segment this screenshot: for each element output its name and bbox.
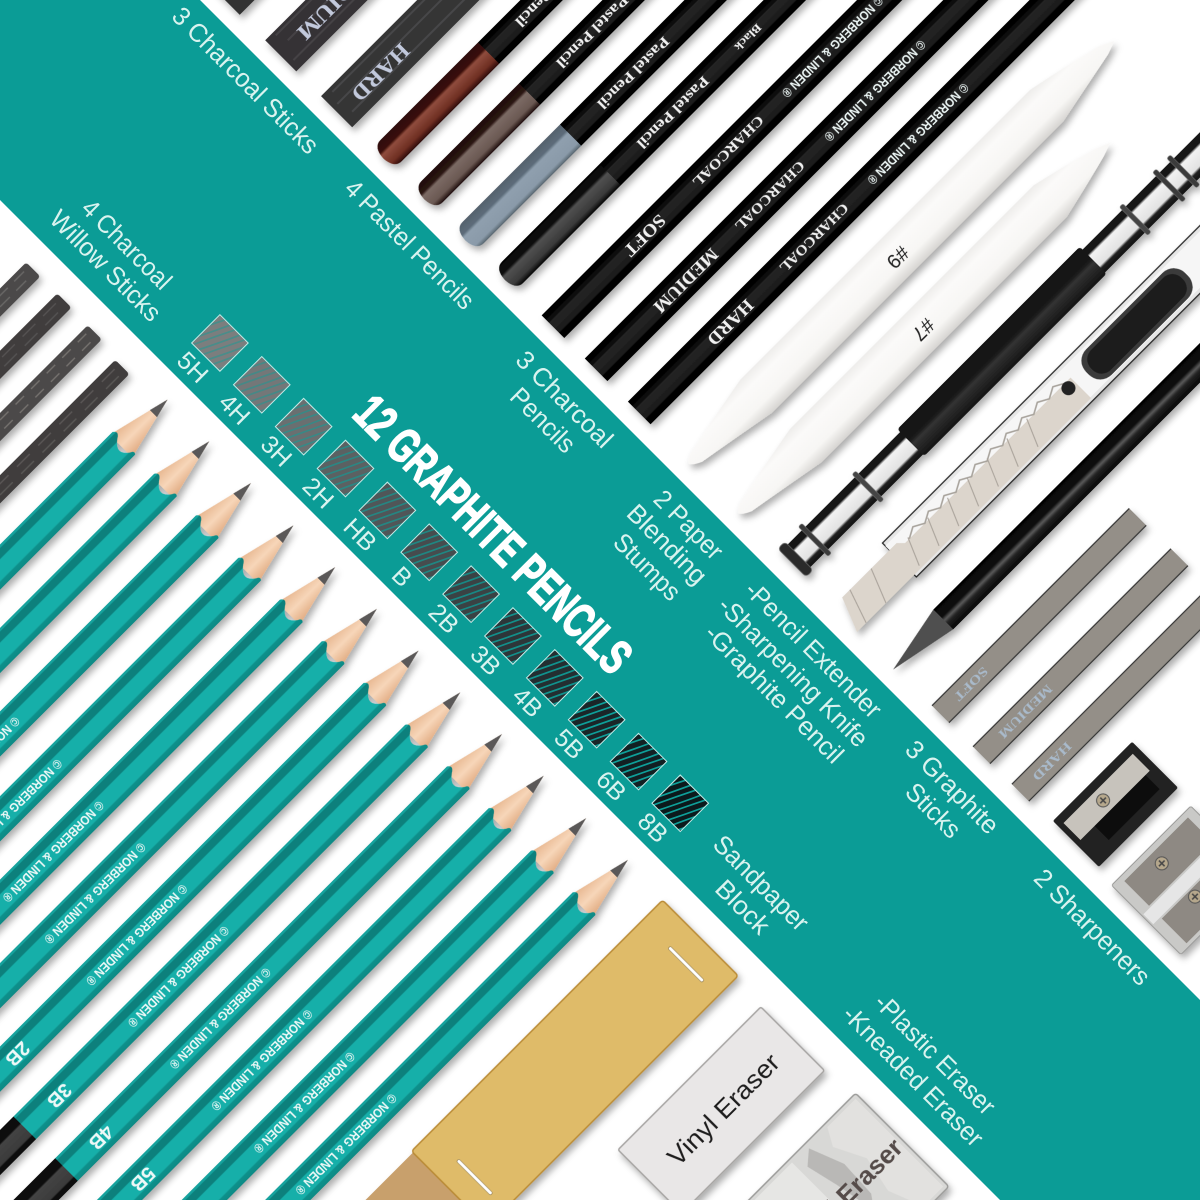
pastel pencils [373, 0, 1039, 291]
graphite stick hard: HARD [1030, 739, 1075, 784]
label: blending stumps: Stumps [607, 527, 687, 607]
label: blending stumps: 2 Paper [648, 484, 730, 566]
pastel pencil brown [414, 0, 959, 210]
stump number 7: #7 [907, 313, 938, 345]
swatch 2H [316, 440, 374, 498]
silver double sharpener [1112, 806, 1200, 955]
label: sandpaper block: Block [709, 873, 777, 941]
paper blending stumps [672, 23, 1179, 530]
kneaded eraser [643, 1093, 949, 1200]
grade labels: 3B [465, 640, 506, 681]
swatch 6B [610, 732, 668, 790]
vinyl eraser: Vinyl Eraser [661, 1047, 786, 1172]
willow stick 3 [0, 325, 102, 693]
pencil 2B: © NORBERG & LINDEN ® [83, 881, 190, 989]
swatch 4B [526, 648, 584, 707]
pencil 6B: © NORBERG & LINDEN ® [250, 1049, 357, 1156]
charcoal pencil hard: HARD [703, 295, 758, 350]
charcoal pencil medium: CHARCOAL [731, 157, 808, 233]
twelve teal graphite pencils [0, 388, 639, 1200]
label: charcoal pencils: Pencils [504, 381, 582, 459]
swatch HB [358, 481, 416, 540]
charcoal pencil hard: CHARCOAL [776, 199, 851, 275]
charcoal pencil soft: CHARCOAL [689, 112, 767, 190]
label: willow sticks: 4 Charcoal [76, 193, 178, 296]
grade labels: 8B [632, 807, 673, 849]
graphite stick soft [932, 508, 1147, 723]
stump number 9: #9 [882, 241, 913, 272]
pencil B [0, 598, 388, 1197]
label: graphite sticks: 3 Graphite [899, 734, 1006, 840]
willow charcoal sticks [0, 262, 134, 770]
grade labels: 5H [171, 346, 214, 389]
pastel pencil black: Pastel Pencil [633, 72, 712, 151]
graphite stick medium [973, 548, 1188, 764]
label: extender, knife, graphite pencil: -Pencil Extender [739, 575, 888, 724]
label: blending stumps: Blending [621, 498, 713, 590]
charcoal pencil medium: © NORBERG & LINDEN ® [821, 37, 928, 144]
grade labels: 3H [255, 430, 297, 473]
label: blending stumps [600, 477, 734, 612]
pencil 5B: © NORBERG & LINDEN ® [208, 1007, 315, 1114]
stump number 9 [672, 23, 1129, 480]
pencil 5H [0, 388, 179, 988]
label: extender, knife, graphite pencil: -Graphite Pencil [699, 618, 850, 769]
pastel pencil grey: Pastel Pencil [594, 33, 672, 111]
pencil 4B [0, 723, 513, 1200]
tools above the band [208, 0, 1200, 956]
charcoal pencil soft [542, 0, 1088, 338]
grade labels: 6B [590, 766, 632, 807]
pencil HB [0, 556, 346, 1155]
pencil 3H [0, 472, 262, 1071]
pencil 3B: © NORBERG & LINDEN ® [124, 923, 232, 1030]
pencil 3B: 3B [42, 1078, 76, 1112]
graphite stick soft: SOFT [951, 664, 991, 705]
label: extender, knife, graphite pencil [692, 569, 896, 774]
label: charcoal sticks: 3 Charcoal Sticks [166, 1, 325, 160]
charcoal pencils [542, 0, 1174, 424]
pencil B: © NORBERG & LINDEN ® [41, 840, 148, 947]
charcoal sticks [209, 0, 876, 127]
swatch 2B [442, 565, 500, 624]
pencil 6B [0, 807, 598, 1200]
pencil 3B [0, 681, 472, 1200]
black sharpener [1053, 742, 1178, 867]
band heading: 12 graphite pencils: 12 GRAPHITE PENCILS [343, 385, 642, 684]
pencil 8B [40, 849, 639, 1200]
pencil 5B [0, 764, 555, 1200]
graphite sticks [932, 507, 1200, 802]
willow stick 2 [0, 293, 71, 661]
grade labels: 2H [297, 472, 339, 514]
pencil 2B: 2B [0, 1037, 34, 1070]
label: willow sticks: Willow Sticks [44, 204, 168, 327]
swatch 3H [274, 398, 333, 456]
swatch 5H [191, 314, 249, 372]
pastel pencil black: Black [731, 21, 763, 53]
swatch 4H [232, 356, 291, 414]
pencil 5B: 5B [125, 1162, 159, 1195]
swatch 5B [568, 690, 626, 749]
swatch 8B [651, 774, 710, 832]
label: graphite sticks: Sticks [899, 776, 967, 844]
charcoal pencil medium [585, 0, 1131, 381]
tools below the band [0, 260, 952, 1200]
pencil 4B: © NORBERG & LINDEN ® [166, 965, 273, 1072]
pencil 4H [0, 430, 221, 1030]
label: sandpaper block: Sandpaper [707, 829, 816, 937]
label: extender, knife, graphite pencil: -Sharpening Knife [712, 590, 875, 753]
label: graphite sticks [878, 734, 1006, 861]
pastel pencil grey [455, 0, 1000, 251]
grade labels: 5B [548, 724, 590, 765]
label: erasers: -Kneaded Eraser [837, 999, 990, 1153]
label: sharpeners: 2 Sharpeners [1028, 863, 1157, 991]
charcoal sticks: HARD [346, 38, 415, 107]
stump number 7 [722, 126, 1126, 530]
grade labels: 4H [213, 388, 255, 431]
grade labels: B [386, 561, 417, 593]
vinyl eraser [618, 1007, 824, 1200]
graphite stick medium: MEDIUM [996, 682, 1056, 742]
willow stick 4 [0, 360, 129, 770]
grade labels: 2B [423, 598, 464, 640]
charcoal pencil medium: MEDIUM [649, 244, 722, 317]
graphite pencil [883, 135, 1200, 680]
charcoal pencil hard: © NORBERG & LINDEN ® [864, 80, 971, 188]
pastel pencil red [373, 0, 918, 169]
pencil 2H [0, 514, 305, 1114]
label: erasers: -Plastic Eraser [868, 987, 1002, 1121]
charcoal pencil hard [628, 0, 1174, 424]
pencil 4B: 4B [84, 1120, 117, 1154]
sharpening knife [825, 76, 1200, 634]
pencil extender [777, 0, 1200, 578]
pastel pencil black [494, 0, 1039, 291]
grade labels [171, 346, 673, 849]
swatch B [400, 523, 458, 582]
sandpaper block [332, 900, 738, 1200]
graphite stick hard [1012, 586, 1200, 802]
shading swatches and grade labels [178, 314, 710, 842]
grade labels: 4B [507, 682, 548, 723]
charcoal pencil soft: SOFT [620, 210, 670, 261]
label: pastel pencils: 4 Pastel Pencils [339, 173, 481, 315]
willow stick 1 [0, 262, 40, 630]
pencil 2B [0, 639, 430, 1200]
swatch 3B [484, 607, 542, 665]
grade labels: HB [338, 513, 382, 557]
label: charcoal pencils: 3 Charcoal [510, 344, 619, 454]
